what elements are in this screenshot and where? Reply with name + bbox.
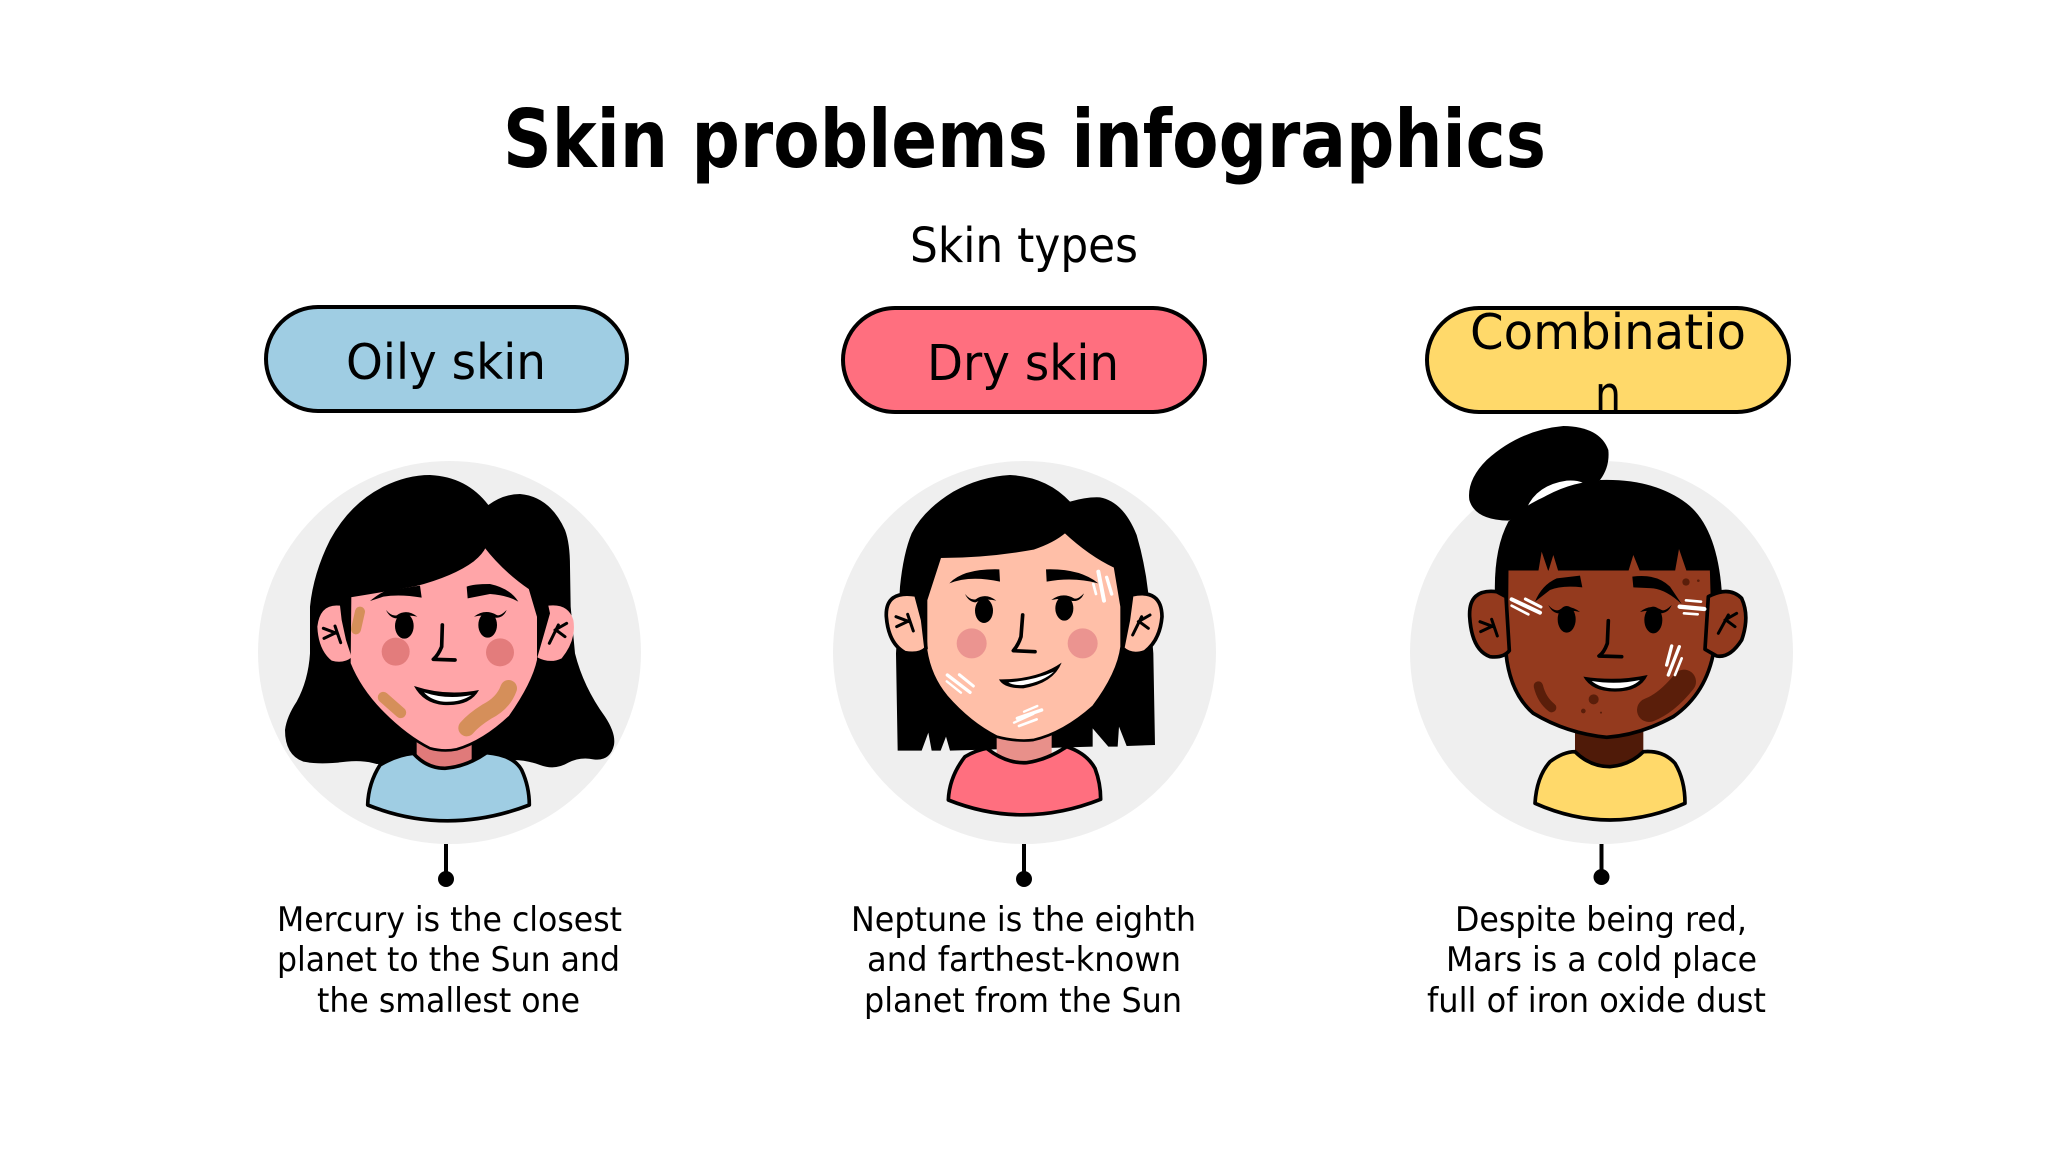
panel: oily skin bbox=[258, 307, 641, 1021]
illustration: combination skin face bbox=[1469, 426, 1746, 820]
dark patches and spots bbox=[1538, 578, 1700, 714]
dry flakes bbox=[947, 572, 1112, 726]
description bbox=[277, 900, 622, 1021]
subtitle: Skin types bbox=[910, 218, 1138, 274]
description: planet from the Sun bbox=[864, 981, 1182, 1021]
description: and farthest-known bbox=[867, 940, 1181, 980]
pill label: combination: Combinatio bbox=[1470, 304, 1746, 361]
pill label: dry skin bbox=[843, 308, 1205, 412]
description: Neptune is the eighth bbox=[851, 900, 1196, 940]
title: Skin problems infographics bbox=[503, 93, 1546, 186]
panel: combination skin bbox=[1410, 304, 1793, 1021]
description: Mercury is the closest bbox=[277, 900, 622, 940]
description: full of iron oxide dust bbox=[1427, 981, 1766, 1021]
pill label: combination: n bbox=[1595, 366, 1621, 423]
connector with dot bbox=[438, 844, 454, 887]
background circle bbox=[833, 461, 1216, 844]
dry flakes bbox=[1512, 599, 1704, 675]
description bbox=[1427, 900, 1766, 1021]
description: Mars is a cold place bbox=[1446, 940, 1757, 980]
description: Despite being red, bbox=[1455, 900, 1747, 940]
connector with dot bbox=[1594, 844, 1610, 885]
connector with dot bbox=[1016, 844, 1032, 887]
background circle bbox=[258, 461, 641, 844]
illustration: oily skin face bbox=[285, 475, 614, 821]
pill label: combination bbox=[1427, 304, 1789, 423]
pill label: dry skin: Dry skin bbox=[927, 335, 1119, 392]
pill label: oily skin bbox=[266, 307, 627, 411]
description: planet to the Sun and bbox=[277, 940, 620, 980]
background circle bbox=[1410, 461, 1793, 844]
panel: dry skin bbox=[833, 308, 1216, 1021]
illustration: dry skin face bbox=[886, 475, 1162, 815]
description: the smallest one bbox=[317, 981, 580, 1021]
oily patches bbox=[356, 612, 509, 728]
description bbox=[851, 900, 1196, 1021]
pill label: oily skin: Oily skin bbox=[346, 334, 546, 391]
